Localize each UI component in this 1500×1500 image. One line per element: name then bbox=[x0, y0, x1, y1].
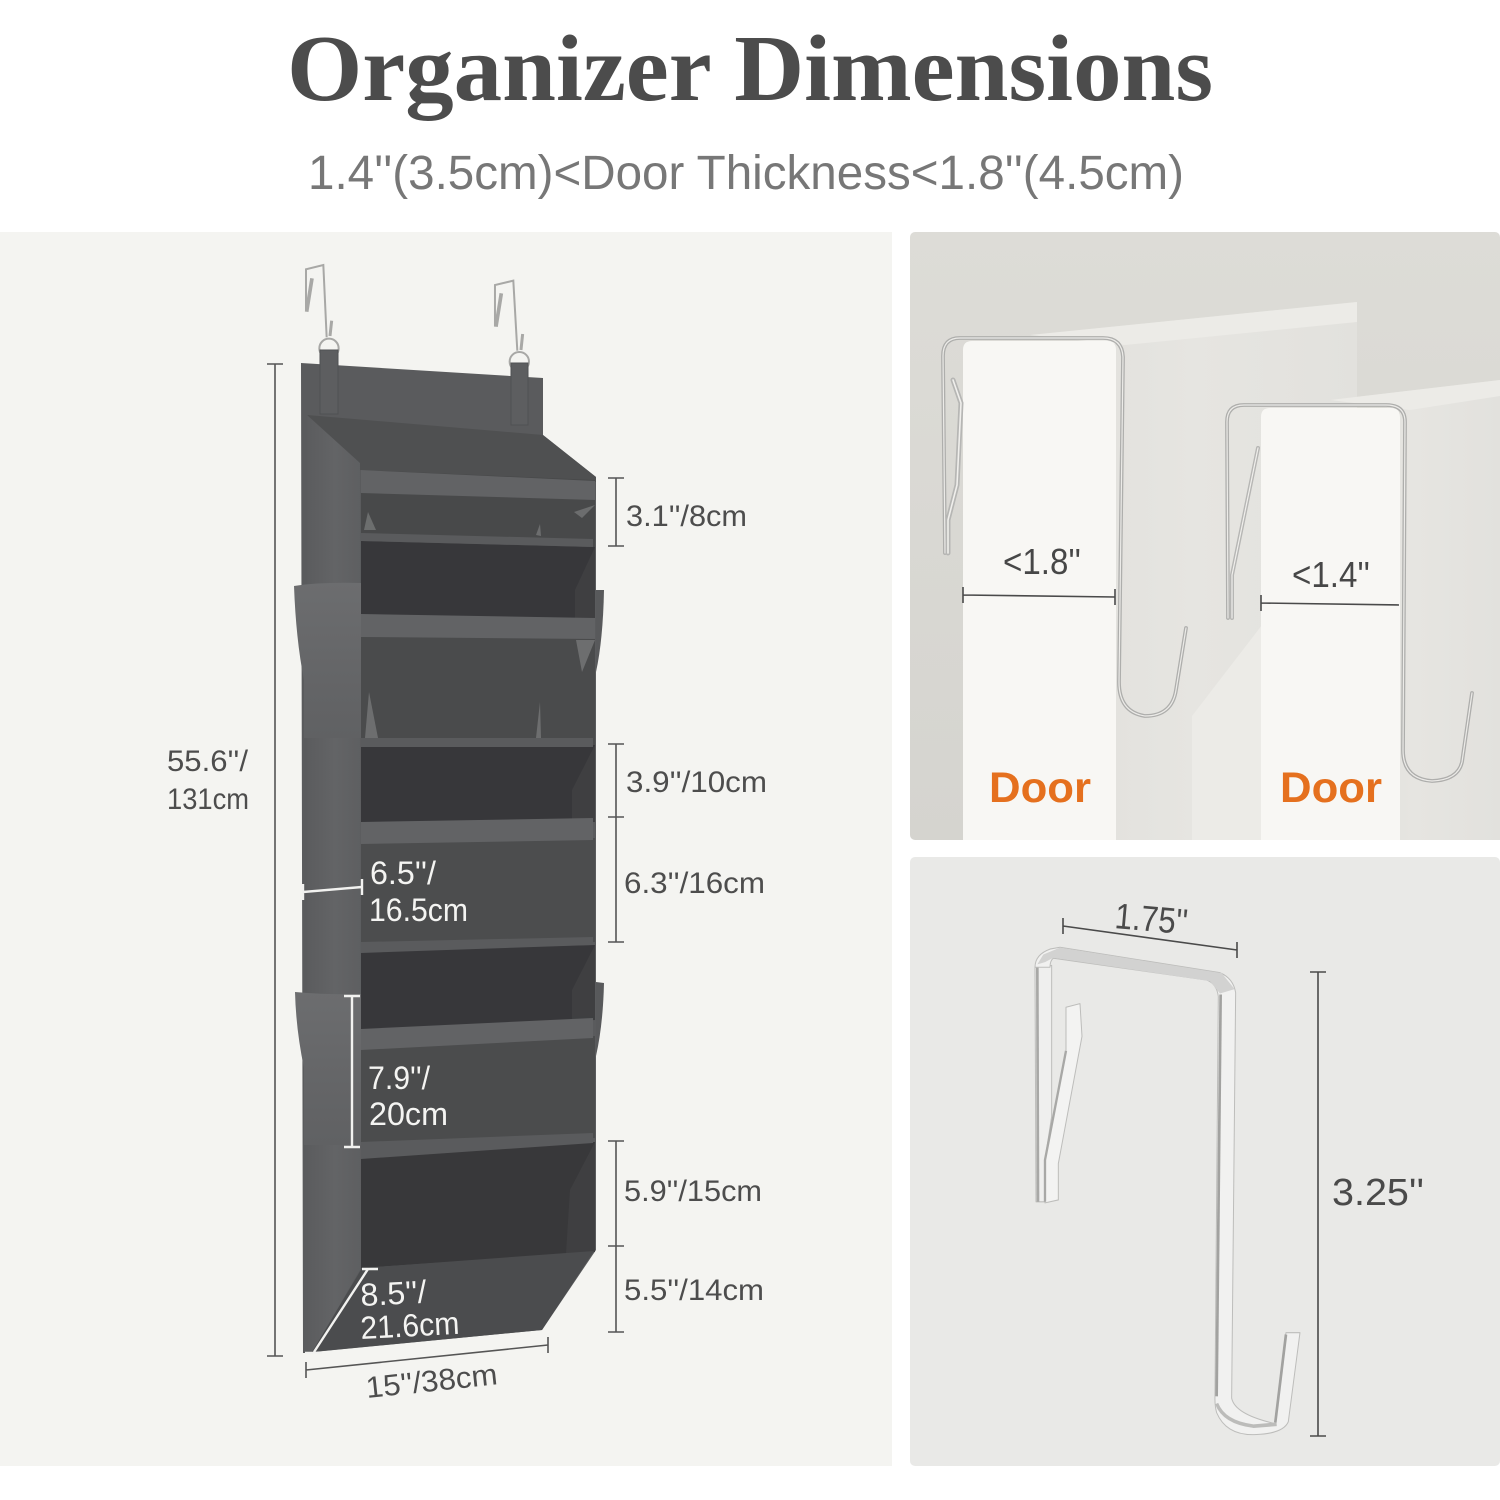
dimension: side pocket depth 6.5 inch: 6.5''/ bbox=[370, 855, 436, 891]
icon: left over-door hook bbox=[306, 265, 339, 358]
panel: hook size bbox=[910, 857, 1500, 1466]
bottom pocket front bbox=[312, 1251, 594, 1352]
hook on thin door bbox=[1227, 405, 1472, 781]
dimension: less than 1.4 inch bbox=[1261, 554, 1399, 611]
dimension: less than 1.8 inch bbox=[963, 541, 1115, 605]
door one front bbox=[963, 341, 1116, 840]
hanging strap right bbox=[511, 363, 528, 425]
dimension: 5.5 inch: 5.5''/14cm bbox=[624, 1274, 764, 1307]
subtitle: door thickness range: 1.4''(3.5cm)<Door Thickness<1.8''(4.5cm) bbox=[308, 147, 1184, 200]
dimension: 5.9 inch: 5.9''/15cm bbox=[624, 1175, 762, 1208]
side pockets right bbox=[596, 590, 604, 1056]
title: Organizer Dimensions bbox=[287, 17, 1213, 121]
dimension: side pocket depth 6.5 inch: 16.5cm bbox=[369, 892, 468, 928]
door two front bbox=[1261, 408, 1400, 840]
top flap bbox=[307, 415, 596, 482]
label: door left: Door bbox=[989, 764, 1091, 812]
right inner walls bbox=[566, 547, 595, 1254]
label: door right: Door bbox=[1280, 764, 1382, 812]
hook clip bbox=[1045, 1004, 1082, 1203]
bend facet bbox=[1217, 1404, 1277, 1426]
dimension: hook width 1.75 inch bbox=[1063, 895, 1237, 958]
dimension: 5.5 inch bbox=[608, 1246, 764, 1332]
fabric scuffs bbox=[364, 505, 595, 738]
panel: organizer dimensions bbox=[0, 232, 892, 1466]
dimension: overall height: 131cm bbox=[167, 783, 249, 816]
dimension: depth 8.5 inch: 8.5''/ bbox=[359, 1274, 427, 1313]
hanging strap left bbox=[320, 350, 338, 414]
organizer body bbox=[294, 350, 604, 1353]
long strip edge bbox=[1217, 995, 1221, 1396]
dimension: 6.3 inch bbox=[608, 817, 765, 942]
door two side bbox=[1330, 380, 1500, 840]
dimension: depth 8.5 inch bbox=[305, 1269, 460, 1353]
dimension: side pocket height 7.9 inch bbox=[344, 996, 448, 1147]
front bands and shelves bbox=[361, 470, 595, 1159]
dimension: hook width 1.75 inch: 1.75'' bbox=[1113, 895, 1190, 942]
dimension: side pocket height 7.9 inch: 20cm bbox=[369, 1096, 448, 1132]
dimension: 3.1 inch: 3.1''/8cm bbox=[626, 500, 747, 533]
back panel bbox=[301, 363, 596, 1353]
dimension: hook height 3.25 inch: 3.25'' bbox=[1332, 1172, 1424, 1214]
hook main body bbox=[1035, 947, 1300, 1435]
dimension: 3.1 inch bbox=[608, 478, 747, 546]
door one side bbox=[1030, 302, 1357, 840]
left side column bbox=[303, 415, 361, 1353]
dimension: less than 1.4 inch: <1.4'' bbox=[1292, 554, 1370, 595]
dimension: 6.3 inch: 6.3''/16cm bbox=[624, 867, 765, 900]
dimension: overall height bbox=[167, 364, 283, 1356]
dimension: 5.9 inch bbox=[608, 1141, 762, 1246]
icon: right over-door hook bbox=[495, 281, 529, 371]
icon: large door hook bbox=[1035, 947, 1300, 1435]
dimension: depth 8.5 inch: 21.6cm bbox=[359, 1305, 460, 1346]
side pockets left bbox=[294, 583, 361, 1145]
tip edge bbox=[1275, 1334, 1286, 1422]
dimension: side pocket height 7.9 inch: 7.9''/ bbox=[368, 1060, 430, 1096]
panel: door thickness fit bbox=[910, 232, 1500, 840]
dimension: hook height 3.25 inch bbox=[1310, 972, 1424, 1436]
shelf section interiors bbox=[361, 470, 595, 1268]
dimension: overall height: 55.6''/ bbox=[167, 745, 249, 778]
dimension: side pocket depth 6.5 inch bbox=[303, 855, 468, 928]
dimension: width 15 inch: 15''/38cm bbox=[364, 1358, 499, 1405]
clip edge bbox=[1045, 1051, 1066, 1202]
dimension: 3.9 inch: 3.9''/10cm bbox=[626, 766, 767, 799]
hook left leg bbox=[1035, 965, 1052, 1202]
dimension: width 15 inch bbox=[306, 1337, 548, 1405]
top bevel bbox=[1037, 948, 1235, 993]
dimension: less than 1.8 inch: <1.8'' bbox=[1003, 541, 1081, 582]
dimension: 3.9 inch bbox=[608, 744, 767, 817]
hook on thick door bbox=[943, 338, 1186, 716]
leg inner shadow bbox=[1033, 967, 1042, 1202]
